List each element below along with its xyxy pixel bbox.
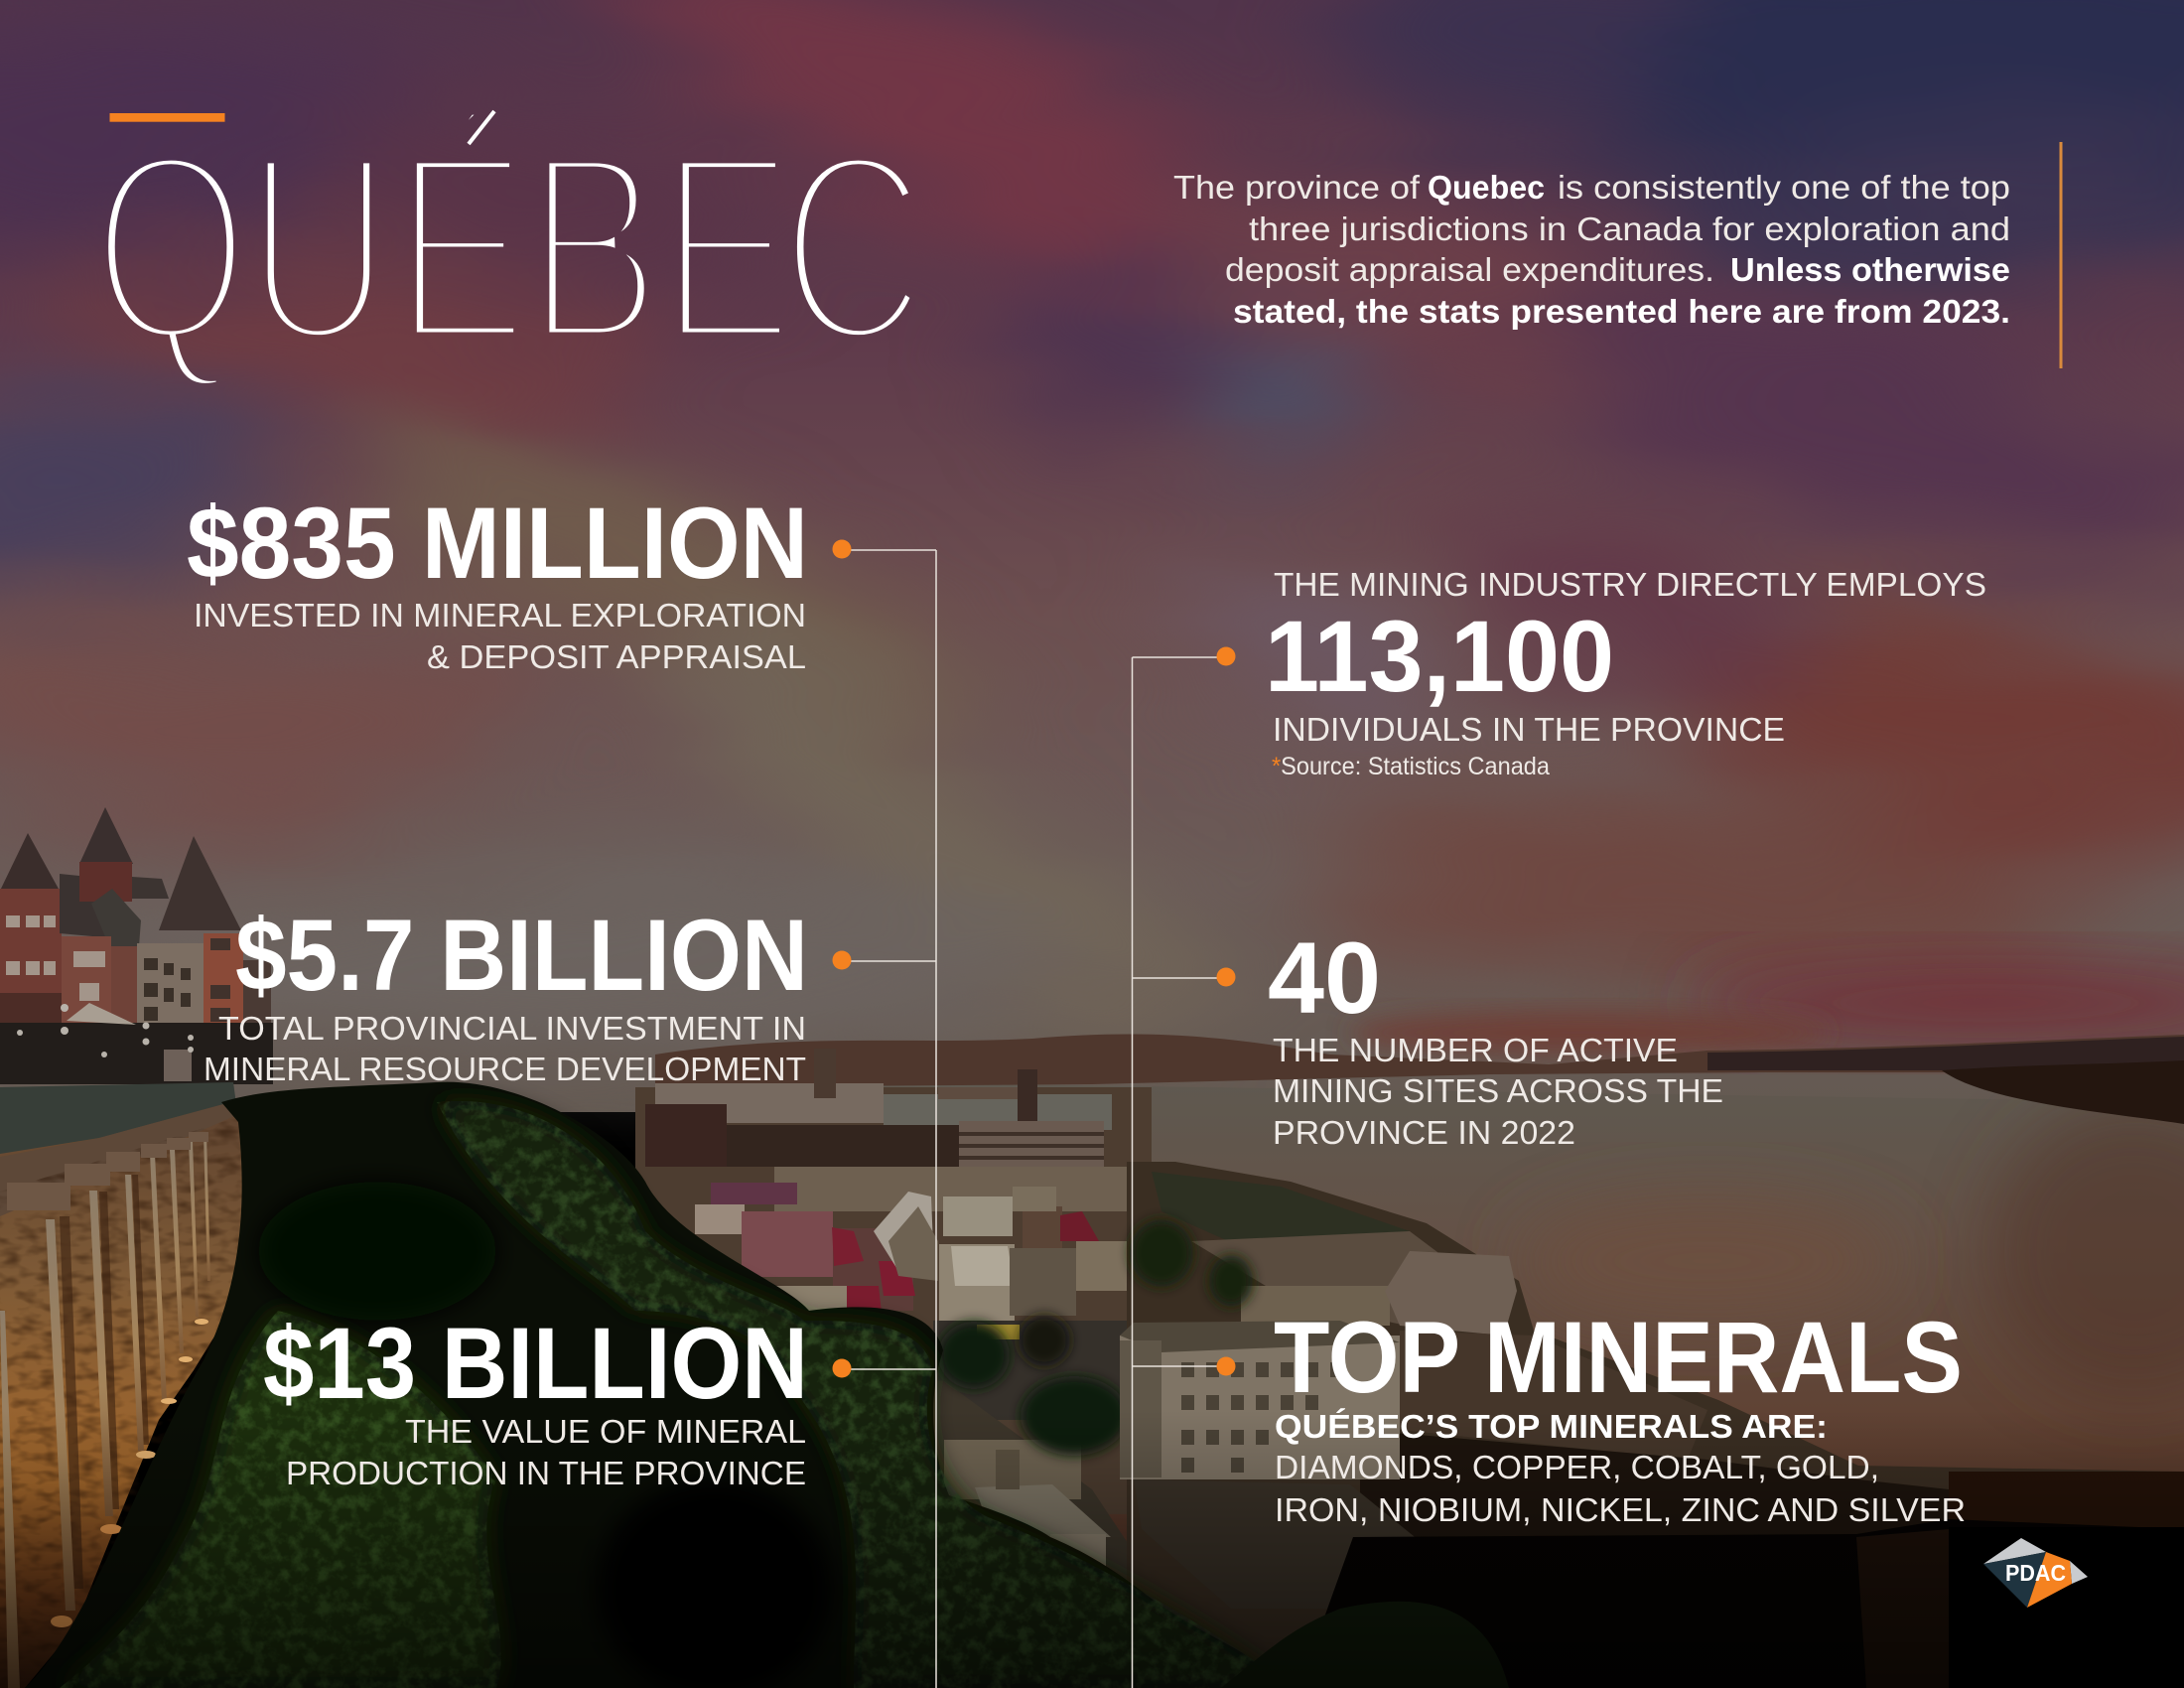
stat: 113,100 employed: THE MINING INDUSTRY DIRECTLY EMPLOYS xyxy=(1274,566,1986,603)
stat: 113,100 employed: INDIVIDUALS IN THE PROVINCE xyxy=(1273,711,1785,748)
intro paragraph: stated, the stats presented here are from 2023. xyxy=(1233,293,2010,330)
stat: $13 billion xyxy=(263,1307,852,1491)
stat: 40 active mining sites: MINING SITES ACROSS THE xyxy=(1273,1072,1723,1109)
stat: $13 billion: THE VALUE OF MINERAL xyxy=(405,1413,806,1450)
stat: top minerals: QUÉBEC’S TOP MINERALS ARE: xyxy=(1275,1408,1828,1445)
stat: $5.7 billion xyxy=(204,899,852,1087)
stat: top minerals: TOP MINERALS xyxy=(1274,1301,1963,1414)
trees xyxy=(25,1082,1509,1688)
stat: 40 active mining sites xyxy=(1217,921,1723,1151)
intro paragraph xyxy=(1173,169,2010,330)
stat: $13 billion: PRODUCTION IN THE PROVINCE xyxy=(286,1455,806,1491)
title: QUÉBEC: QUÉBEC xyxy=(92,96,926,398)
waterfront quay and land xyxy=(938,1162,2184,1688)
grain elevator xyxy=(655,1083,884,1123)
distant hills xyxy=(655,1034,2184,1124)
title acute accent stroke xyxy=(469,111,494,144)
stat: $835 million: $835 MILLION xyxy=(187,487,808,600)
PDAC logo xyxy=(1983,1538,2088,1608)
intro paragraph: three jurisdictions in Canada for exploration and xyxy=(1249,211,2010,247)
orange accent bar above title xyxy=(109,113,224,122)
stat: top minerals: DIAMONDS, COPPER, COBALT, GOLD, xyxy=(1275,1449,1879,1485)
connector lines left xyxy=(850,550,936,1688)
lit pillar edges xyxy=(46,1219,75,1611)
stat: $835 million: & DEPOSIT APPRAISAL xyxy=(427,638,806,675)
stat: 40 active mining sites: THE NUMBER OF ACTIVE xyxy=(1273,1032,1678,1068)
pillar capitals xyxy=(7,1183,70,1210)
PDAC logo: PDAC xyxy=(2005,1560,2066,1586)
stat: $5.7 billion: TOTAL PROVINCIAL INVESTMENT IN xyxy=(218,1010,806,1047)
sky with sunset clouds xyxy=(0,0,2184,1112)
orange rule beside intro xyxy=(2059,142,2063,368)
stat: 40 active mining sites: 40 xyxy=(1268,921,1381,1035)
office building xyxy=(1120,1321,1400,1479)
stat: top minerals: IRON, NIOBIUM, NICKEL, ZINC AND SILVER xyxy=(1275,1491,1966,1528)
intro paragraph: is consistently one of the top xyxy=(1558,169,2010,206)
intro paragraph: Unless otherwise xyxy=(1730,251,2010,288)
château Frontenac xyxy=(0,807,273,1084)
bottom darkening xyxy=(0,1410,2184,1688)
stat: top minerals xyxy=(1217,1301,1966,1528)
stat: 40 active mining sites: PROVINCE IN 2022 xyxy=(1273,1114,1575,1151)
intro paragraph: Quebec xyxy=(1428,169,1545,206)
intro paragraph: The province of xyxy=(1173,169,1421,206)
pillar shadows xyxy=(60,1216,83,1589)
intro paragraph: deposit appraisal expenditures. xyxy=(1225,251,1714,288)
stat: 113,100 employed: 113,100 xyxy=(1265,600,1614,713)
stat: $835 million: INVESTED IN MINERAL EXPLORATION xyxy=(194,597,806,633)
stone terrace wall with pillars xyxy=(0,1082,248,1688)
connector lines right xyxy=(1132,657,1225,1688)
old town buildings xyxy=(635,1049,1152,1688)
stat: 113,100 employed xyxy=(1217,566,1986,780)
stat: $13 billion: $13 BILLION xyxy=(263,1307,808,1420)
stat: $835 million xyxy=(187,487,852,675)
stat: 113,100 employed: *Source: Statistics Canada xyxy=(1272,753,1550,780)
stat: $5.7 billion: MINERAL RESOURCE DEVELOPMENT xyxy=(204,1051,806,1087)
river xyxy=(874,1082,2184,1688)
stat: $5.7 billion: $5.7 BILLION xyxy=(235,899,808,1012)
